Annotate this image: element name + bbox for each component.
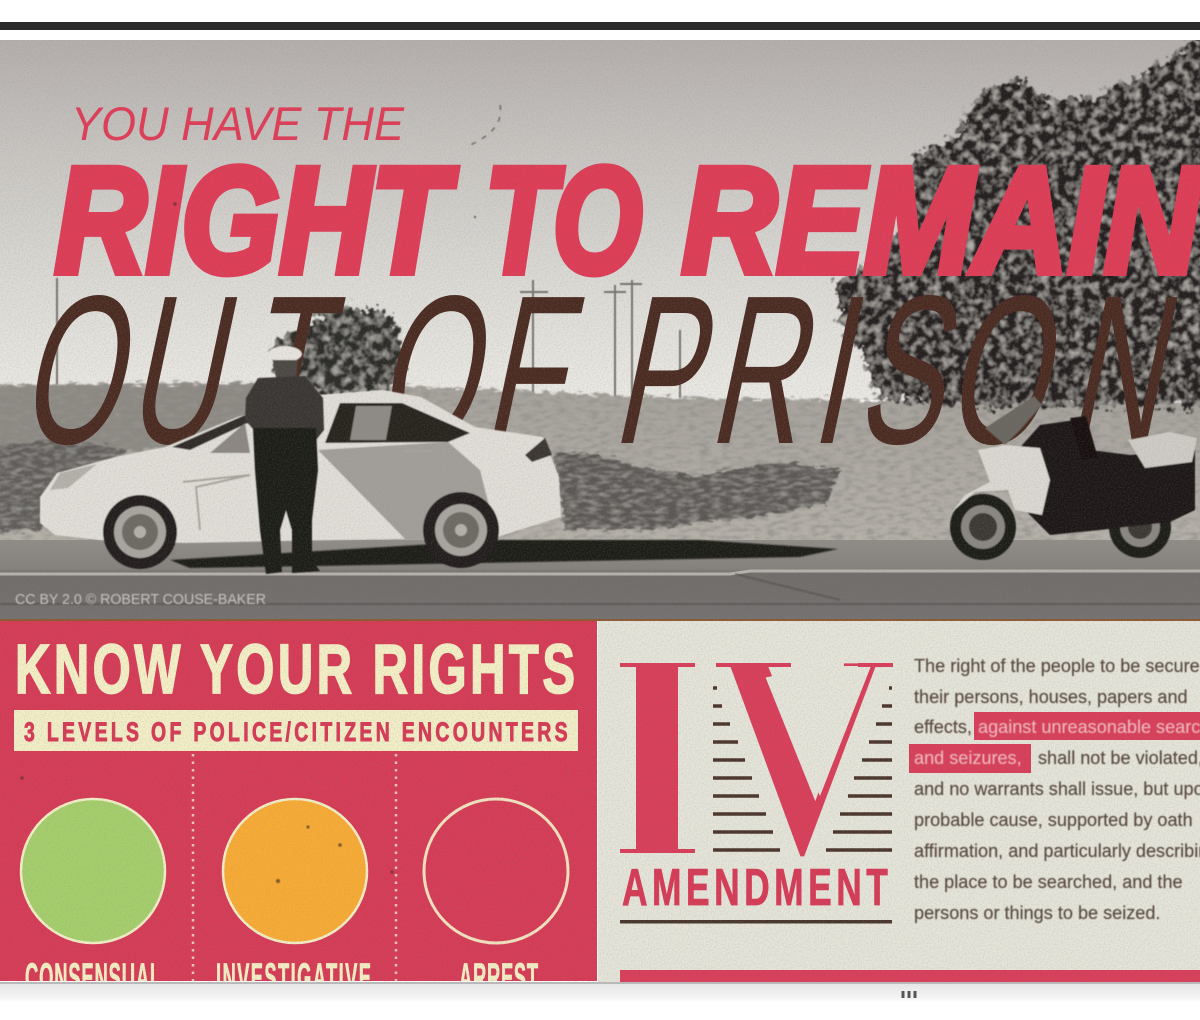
front wheel (103, 495, 177, 569)
panel: fourth amendment (598, 596, 1200, 983)
white top box (1128, 432, 1197, 468)
large tree at right (833, 32, 1200, 408)
RIGHT TO REMAIN headline: RIGHT (55, 136, 458, 304)
pagination ticks (903, 991, 915, 998)
rear shaded door (318, 442, 497, 540)
amendment text: effects, (914, 717, 972, 737)
OUT OF PRISON headline: OUT OF PRISON (8, 251, 1198, 488)
headlamp (50, 464, 97, 490)
level: consensual: CONSENSUAL (25, 955, 161, 1000)
window interior light (350, 406, 392, 440)
engine and pannier (1000, 420, 1195, 535)
RIGHT TO REMAIN headline (55, 136, 1200, 304)
amendment text: the place to be searched, and the (914, 872, 1183, 892)
thin serifs on I (612, 660, 705, 860)
police motorcycle (950, 396, 1197, 560)
photo credit: CC BY 2.0 © ROBERT COUSE-BAKER (15, 592, 266, 608)
top dark rule (0, 22, 1200, 30)
front side window (210, 423, 250, 453)
rear wheel (423, 492, 499, 568)
tail lamp (525, 438, 552, 462)
cream background (598, 621, 1200, 982)
level: consensual (21, 799, 165, 1000)
amendment text (914, 656, 1200, 923)
car shadow (170, 540, 838, 568)
front wheel (950, 494, 1016, 560)
level: arrest (424, 799, 568, 1000)
windscreen (985, 396, 1042, 445)
banner: 3 levels: 3 LEVELS OF POLICE/CITIZEN ENCOUNTERS (24, 717, 568, 747)
level: arrest: ARREST (459, 955, 538, 1000)
small distant tree (270, 306, 405, 395)
dark roadside brush, left (0, 440, 130, 532)
photo edge (0, 619, 1200, 621)
white front fairing (952, 445, 1050, 515)
utility poles (57, 278, 680, 405)
amendment label: AMENDMENT (622, 859, 888, 917)
legs and boots (253, 428, 320, 574)
YOU HAVE THE headline: YOU HAVE THE (71, 97, 405, 150)
level: investigative (216, 799, 371, 1000)
hero photograph: traffic stop (0, 32, 1200, 621)
rider seat (1070, 416, 1098, 460)
highlight: unreasonable search (974, 712, 1200, 740)
side window dark (325, 403, 470, 443)
amendment text: probable cause, supported by oath (914, 810, 1193, 830)
striped lines beside V (713, 688, 892, 850)
head (274, 360, 298, 378)
helmet (268, 346, 302, 362)
rule below amendment (620, 920, 892, 924)
road crack (0, 574, 1200, 604)
roman numeral IV: V (704, 596, 899, 915)
red background (0, 621, 597, 982)
sky (0, 40, 1200, 400)
highlight: seizures (909, 744, 1031, 773)
torso (245, 376, 324, 440)
white car (40, 390, 561, 569)
door lines (182, 474, 250, 530)
level: investigative: INVESTIGATIVE (216, 955, 371, 1000)
page footer strip (0, 982, 1200, 1002)
police officer (245, 346, 324, 574)
RIGHT TO REMAIN headline: TO (485, 136, 642, 304)
trimming around V (700, 660, 910, 862)
specks and scratches (20, 105, 501, 883)
amendment text: persons or things to be seized. (914, 903, 1160, 923)
roman numeral IV: I (613, 596, 700, 914)
road edge line (0, 571, 1200, 574)
amendment text: their persons, houses, papers and (914, 687, 1188, 707)
dark roadside brush, centre (553, 452, 840, 530)
road surface (0, 540, 1200, 621)
distant darker field, left (0, 384, 280, 455)
bottom red bar (620, 970, 1200, 983)
panel: know your rights (0, 621, 597, 1000)
amendment text: and seizures, (914, 748, 1022, 768)
heading: know your rights: KNOW YOUR RIGHTS (15, 629, 575, 708)
windshield (172, 415, 250, 450)
amendment text: shall not be violated, (1038, 748, 1200, 768)
rear wheel (1109, 496, 1171, 558)
car body (40, 390, 561, 543)
roman numeral IV (612, 596, 910, 915)
grass field (0, 382, 1200, 550)
